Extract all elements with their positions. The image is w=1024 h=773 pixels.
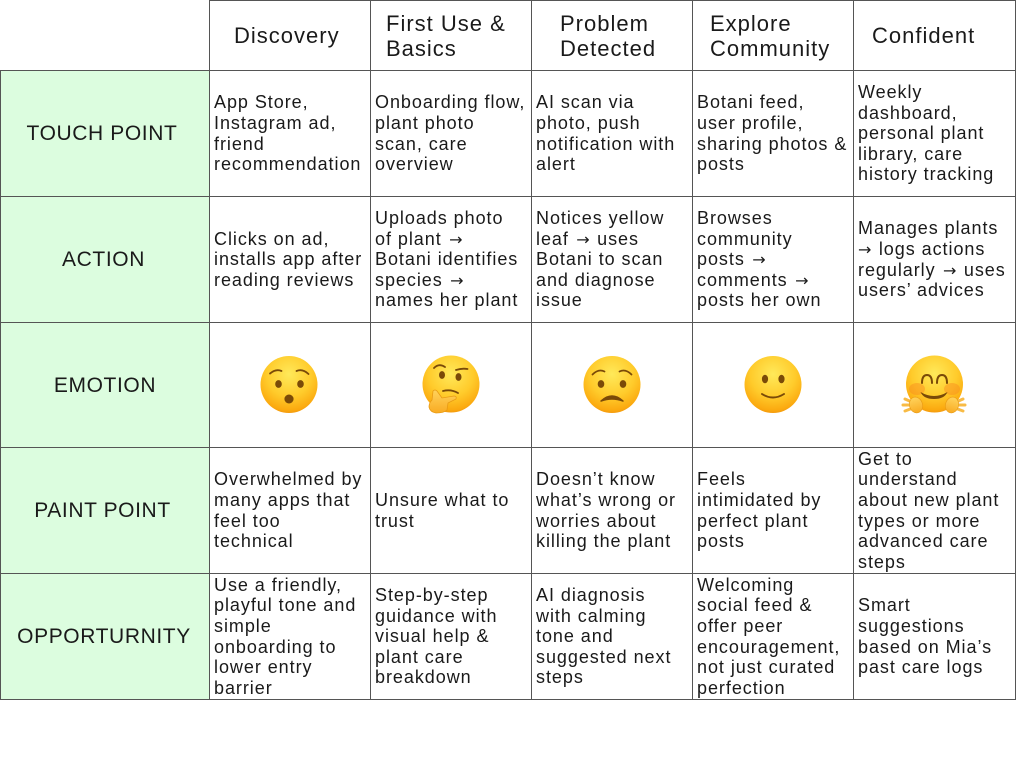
action: confident: → logs actions [858, 239, 985, 259]
action: explore community: community [697, 229, 793, 249]
opportunity: discovery [214, 575, 356, 698]
touch point: confident: library, care [858, 144, 963, 164]
row label: emotion: EMOTION [54, 374, 156, 396]
heading: first use and basics: Basics [386, 36, 457, 60]
pain point: confident: Get to [858, 449, 913, 469]
opportunity: discovery: Use a friendly, [214, 575, 342, 595]
pain point: discovery [214, 469, 362, 551]
opportunity: confident: suggestions [858, 616, 965, 636]
pain point: explore community: Feels [697, 469, 746, 489]
opportunity: discovery: onboarding to [214, 636, 336, 656]
action: problem detected: Notices yellow [536, 208, 664, 228]
pain point: first use: trust [375, 510, 415, 530]
opportunity: problem detected [536, 585, 671, 687]
heading: confident: Confident [872, 23, 975, 48]
opportunity: first use: plant care [375, 647, 464, 667]
row label: opportunity: OPPORTURNITY [17, 624, 191, 648]
touch point: problem detected: alert [536, 154, 576, 174]
action: explore community: posts → [697, 249, 766, 269]
heading: problem detected: Detected [560, 36, 656, 60]
pain point: problem detected: Doesn’t know [536, 469, 655, 489]
opportunity: discovery: barrier [214, 678, 273, 698]
icon: worried face [584, 356, 640, 413]
row label: touch point: TOUCH POINT [27, 122, 177, 144]
touch point: explore community: user profile, [697, 113, 803, 133]
touch point: explore community: posts [697, 154, 745, 174]
opportunity: first use: breakdown [375, 667, 472, 687]
action: problem detected [536, 208, 664, 310]
pain point: problem detected: killing the plant [536, 531, 671, 551]
pain point: discovery: many apps that [214, 490, 350, 510]
pain point: problem detected: what’s wrong or [536, 490, 676, 510]
touch point: first use: Onboarding flow, [375, 92, 525, 112]
touch point: confident [858, 82, 994, 184]
action: explore community: posts her own [697, 290, 821, 310]
opportunity: first use: guidance with [375, 606, 497, 626]
pain point: explore community: perfect plant [697, 510, 808, 530]
touch point: explore community: Botani feed, [697, 92, 804, 112]
opportunity: explore community: perfection [697, 678, 786, 698]
touch point: explore community [697, 92, 847, 174]
heading: first use and basics: First Use & [386, 10, 506, 36]
pain point: confident [858, 449, 999, 572]
opportunity: problem detected: suggested next [536, 647, 671, 667]
touch point: problem detected: AI scan via [536, 92, 634, 112]
action: first use: names her plant [375, 290, 518, 310]
touch point: problem detected [536, 92, 675, 174]
opportunity: discovery: simple [214, 616, 272, 636]
icon: smiling face [744, 356, 802, 413]
opportunity: confident [858, 595, 992, 677]
row label: opportunity [1, 574, 209, 699]
action: discovery [214, 229, 362, 290]
opportunity: problem detected: tone and [536, 626, 614, 646]
opportunity: discovery: lower entry [214, 657, 312, 677]
heading: problem detected: Problem [560, 10, 649, 36]
opportunity: first use [375, 585, 497, 687]
action: confident: regularly → uses [858, 260, 1006, 280]
row label: pain point [1, 448, 209, 573]
opportunity: explore community: Welcoming [697, 575, 794, 595]
touch point: discovery [214, 92, 361, 174]
opportunity: discovery: playful tone and [214, 595, 356, 615]
pain point: problem detected [536, 469, 676, 551]
action: first use: of plant → [375, 229, 463, 249]
pain point: discovery: technical [214, 531, 294, 551]
opportunity: explore community [697, 575, 840, 698]
action: discovery: reading reviews [214, 270, 354, 290]
touch point: confident: personal plant [858, 123, 984, 143]
row label: action [1, 197, 209, 322]
pain point: explore community: posts [697, 531, 745, 551]
action: confident [858, 218, 1006, 300]
action: discovery: installs app after [214, 249, 362, 269]
opportunity: explore community: not just curated [697, 657, 835, 677]
pain point: discovery: Overwhelmed by [214, 469, 362, 489]
pain point: explore community: intimidated by [697, 490, 821, 510]
heading: explore community: Community [710, 36, 830, 60]
touch point: first use: scan, care [375, 134, 468, 154]
opportunity: explore community: encouragement, [697, 636, 840, 656]
pain point: confident: types or more [858, 510, 980, 530]
action: problem detected: issue [536, 290, 583, 310]
heading: explore community: Explore [710, 10, 792, 36]
opportunity: problem detected: steps [536, 667, 584, 687]
icon: hugging face [903, 356, 965, 414]
pain point: first use [375, 490, 509, 530]
pain point: confident: advanced care [858, 531, 988, 551]
action: first use [375, 208, 518, 310]
action: problem detected: and diagnose [536, 270, 656, 290]
icon: surprised face [260, 356, 318, 413]
action: explore community: Browses [697, 208, 773, 228]
action: problem detected: leaf → uses [536, 229, 639, 249]
opportunity: first use: visual help & [375, 626, 489, 646]
touch point: problem detected: photo, push [536, 113, 641, 133]
row label: touch point [1, 71, 209, 196]
heading: discovery: Discovery [234, 23, 340, 48]
touch point: discovery: App Store, [214, 92, 309, 112]
action: confident: Manages plants [858, 218, 998, 238]
pain point: explore community [697, 469, 821, 551]
touch point: first use: plant photo [375, 113, 475, 133]
icon: thinking face [422, 356, 480, 413]
touch point: problem detected: notification with [536, 134, 675, 154]
action: explore community: comments → [697, 270, 808, 290]
row label: emotion [1, 323, 209, 448]
row label: pain point: PAINT POINT [34, 498, 171, 522]
pain point: confident: about new plant [858, 490, 999, 510]
action: first use: Uploads photo [375, 208, 503, 228]
opportunity: problem detected: AI diagnosis [536, 585, 645, 605]
pain point: confident: steps [858, 552, 906, 572]
opportunity: problem detected: with calming [536, 606, 646, 626]
action: problem detected: Botani to scan [536, 249, 663, 269]
pain point: confident: understand [858, 469, 958, 489]
action: discovery: Clicks on ad, [214, 229, 329, 249]
action: first use: species → [375, 270, 464, 290]
opportunity: confident: past care logs [858, 657, 983, 677]
heading: problem detected [560, 10, 656, 60]
opportunity: first use: Step-by-step [375, 585, 488, 605]
touch point: first use: overview [375, 154, 454, 174]
touch point: discovery: Instagram ad, [214, 113, 336, 133]
touch point: confident: history tracking [858, 164, 994, 184]
pain point: problem detected: worries about [536, 510, 656, 530]
touch point: discovery: friend [214, 134, 265, 154]
opportunity: explore community: offer peer [697, 616, 783, 636]
pain point: discovery: feel too [214, 510, 281, 530]
opportunity: explore community: social feed & [697, 595, 812, 615]
touch point: discovery: recommendation [214, 154, 361, 174]
heading: first use and basics [386, 10, 506, 60]
pain point: first use: Unsure what to [375, 490, 509, 510]
heading: explore community [710, 10, 830, 60]
action: confident: users’ advices [858, 280, 985, 300]
action: explore community [697, 208, 821, 310]
opportunity: confident: based on Mia’s [858, 636, 992, 656]
opportunity: confident: Smart [858, 595, 911, 615]
row label: action: ACTION [62, 248, 145, 270]
touch point: explore community: sharing photos & [697, 134, 847, 154]
touch point: first use [375, 92, 525, 174]
touch point: confident: dashboard, [858, 103, 958, 123]
touch point: confident: Weekly [858, 82, 922, 102]
action: first use: Botani identifies [375, 249, 518, 269]
